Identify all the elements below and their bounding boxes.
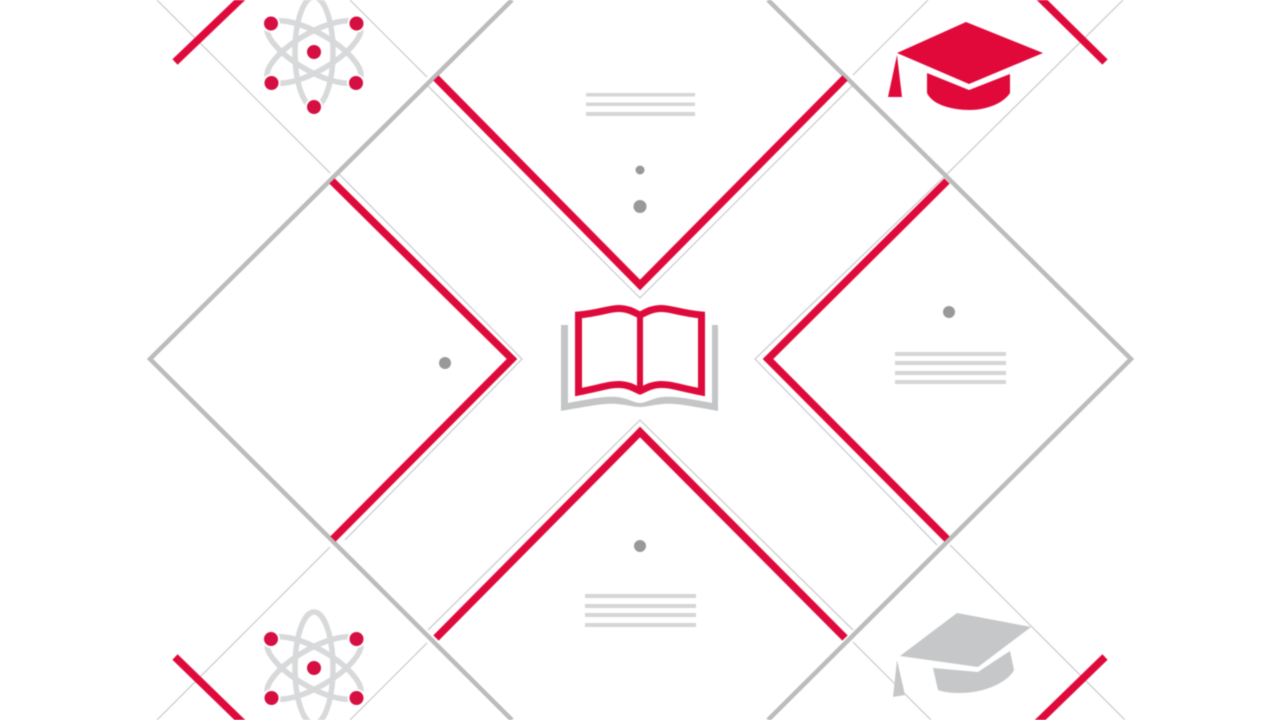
icon: atom top [259, 0, 369, 115]
text placeholder: bottom diamond dot [634, 540, 646, 552]
text placeholder: bottom diamond lines [585, 594, 696, 627]
accent: bottom right red stroke [1036, 657, 1105, 720]
text placeholder: top diamond dot [634, 200, 646, 213]
panel: bottom diamond red chevron [436, 432, 845, 638]
icon: open book [561, 308, 718, 411]
panel: top diamond red chevron [436, 78, 845, 285]
text placeholder: right diamond dot [943, 306, 955, 318]
panel: left diamond red chevron [332, 181, 512, 539]
text placeholder: left diamond dot [439, 357, 451, 369]
panel: right diamond red chevron [768, 181, 947, 539]
gray diamond frame [150, 0, 1131, 720]
accent: top left red stroke [175, 0, 244, 62]
icon: gray graduation cap [893, 613, 1031, 697]
text placeholder: top diamond small dot [636, 166, 644, 174]
accent: top right red stroke [1038, 0, 1105, 62]
icon: atom bottom [259, 612, 369, 720]
accent: bottom left red stroke [175, 657, 244, 720]
text placeholder: right diamond lines [895, 352, 1006, 384]
text placeholder: top diamond lines [586, 93, 695, 116]
icon: red graduation cap [888, 22, 1043, 110]
